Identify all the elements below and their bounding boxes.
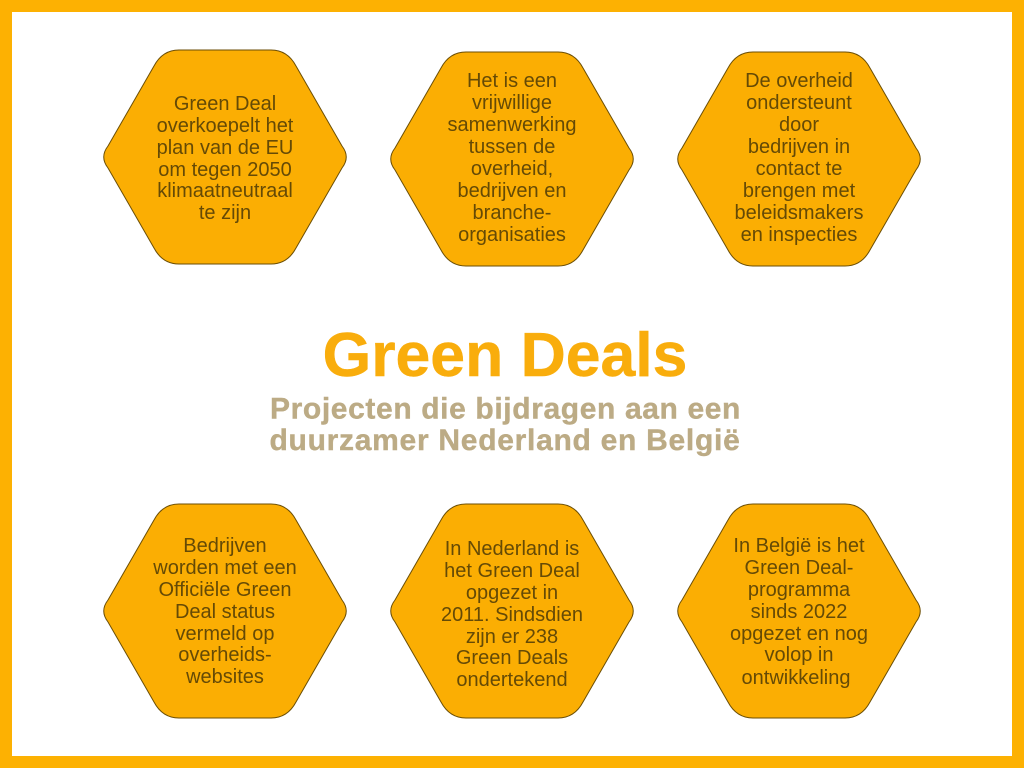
text block: bedrijven in — [748, 136, 850, 158]
hexagon shape — [104, 504, 346, 718]
text block: Green Deal — [174, 93, 276, 115]
text block: samenwerking — [448, 114, 576, 136]
text block: opgezet en nog — [730, 623, 868, 645]
hexagon shape — [391, 52, 633, 266]
text block: opgezet in — [466, 582, 558, 604]
text block: In Nederland is — [445, 538, 579, 560]
hexagon shape — [104, 50, 346, 264]
text block: het Green Deal — [444, 560, 580, 582]
panel: official status — [104, 504, 346, 718]
text block: branche- — [473, 202, 551, 224]
text block: contact te — [756, 158, 842, 180]
text block: organisaties — [458, 224, 566, 246]
text block: worden met een — [152, 557, 297, 579]
text block: brengen met — [743, 180, 856, 202]
text block: overheids- — [178, 644, 272, 666]
title: Green Deals — [323, 320, 687, 390]
text block: In België is het — [733, 535, 865, 557]
text block: Green Deals — [456, 647, 568, 669]
panel: Netherlands — [391, 504, 633, 718]
text block: ontwikkeling — [742, 667, 850, 689]
panel: government support — [678, 52, 920, 266]
text block: 2011. Sindsdien — [441, 604, 583, 626]
text block: beleidsmakers — [735, 202, 863, 224]
text block: Officiële Green — [158, 579, 292, 601]
subtitle: Projecten die bijdragen aan een — [270, 392, 741, 426]
text block: plan van de EU — [157, 137, 293, 159]
text block: bedrijven en — [458, 180, 566, 202]
hexagon shape — [391, 504, 633, 718]
hexagon shape — [678, 52, 920, 266]
text block: Bedrijven — [183, 535, 267, 557]
subtitle: duurzamer Nederland en België — [270, 424, 740, 457]
text block: klimaatneutraal — [157, 180, 293, 202]
text block: om tegen 2050 — [158, 159, 292, 181]
text block: Green Deal- — [745, 557, 853, 579]
text block: ondertekend — [456, 669, 568, 691]
text block: zijn er 238 — [466, 626, 558, 648]
text block: overheid, — [471, 158, 553, 180]
text block: sinds 2022 — [751, 601, 847, 623]
text block: door — [779, 114, 819, 136]
text block: ondersteunt — [746, 92, 852, 114]
text block: te zijn — [199, 202, 251, 224]
text block: tussen de — [469, 136, 555, 158]
text block: programma — [748, 579, 851, 601]
panel: voluntary cooperation — [391, 52, 633, 266]
text block: volop in — [765, 644, 833, 666]
text block: en inspecties — [741, 224, 857, 246]
text block: Het is een — [467, 70, 557, 92]
text block: websites — [185, 666, 264, 688]
panel: EU climate plan — [104, 50, 346, 264]
panel: Belgium — [678, 504, 920, 718]
text block: overkoepelt het — [157, 115, 294, 137]
text block: vermeld op — [176, 623, 274, 645]
text block: vrijwillige — [472, 92, 552, 114]
hexagon shape — [678, 504, 920, 718]
text block: De overheid — [745, 70, 853, 92]
text block: Deal status — [175, 601, 275, 623]
